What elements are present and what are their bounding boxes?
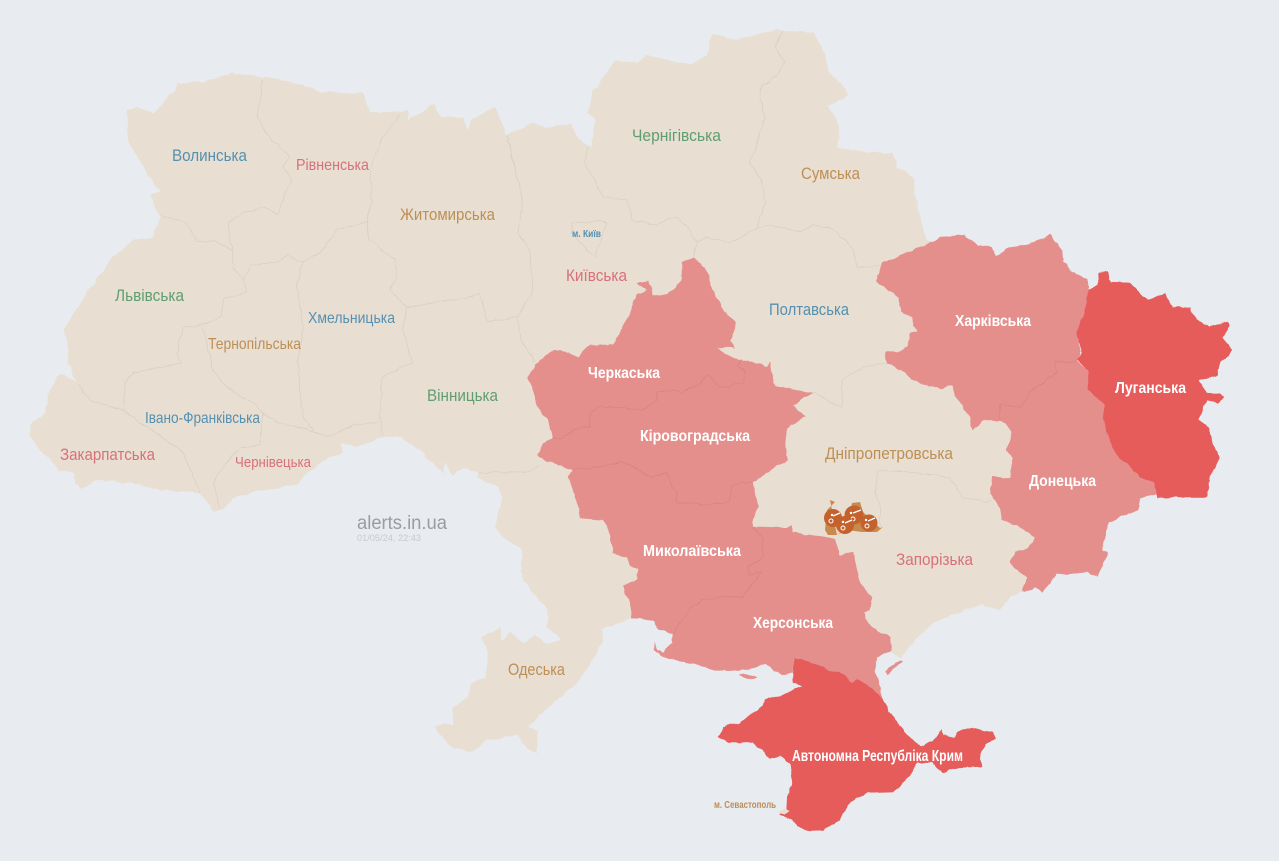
region: Luhansk oblast: [1077, 272, 1233, 498]
label: Chernihiv: Чернігівська: [632, 126, 721, 145]
label: Mykolaiv: Миколаївська: [643, 543, 741, 560]
label: Zaporizhzhia: Запорізька: [896, 550, 973, 569]
region: Cherkasy oblast: [528, 258, 745, 438]
label: Zakarpattia: Закарпатська: [60, 445, 155, 464]
icon group: artillery markers over Nikopol area: [824, 500, 883, 535]
region: Crimea: [718, 658, 995, 831]
label: Sevastopol: м. Севастополь: [714, 800, 776, 811]
label: Kharkiv: Харківська: [955, 313, 1031, 330]
label: Crimea: Автономна Республіка Крим: [792, 748, 963, 765]
icon: artillery marker 3: [836, 516, 854, 534]
label: Khmelnytskyi: Хмельницька: [308, 310, 395, 327]
label: Kirovohrad: Кіровоградська: [640, 428, 750, 445]
watermark: site name: alerts.in.ua: [357, 513, 447, 534]
label: Kyiv oblast: Київська: [566, 266, 627, 285]
oblast borders: [78, 30, 992, 527]
label: Vinnytsia: Вінницька: [427, 386, 498, 405]
region: Kherson spits: [740, 660, 903, 679]
region: Mykolaiv oblast: [568, 462, 763, 633]
label: Donetsk: Донецька: [1029, 473, 1096, 490]
label: Zhytomyr: Житомирська: [400, 205, 495, 224]
oblast labels: [60, 126, 1186, 811]
label: Luhansk: Луганська: [1115, 380, 1186, 397]
inner borders between alert oblasts: [553, 360, 1077, 633]
label: Cherkasy: Черкаська: [588, 365, 660, 382]
label: Volyn: Волинська: [172, 146, 247, 165]
label: Chernivtsi: Чернівецька: [235, 454, 312, 471]
icon: artillery marker 1: [824, 509, 842, 527]
watermark: timestamp: 01/05/24, 22:43: [357, 533, 421, 543]
icon: artillery marker 2: [844, 506, 864, 524]
label: Ivano-Frankivsk: Івано-Франківська: [145, 410, 260, 427]
landmass: oblasts without alert: [30, 30, 1060, 753]
label: Kherson: Херсонська: [753, 615, 833, 632]
label: Odesa: Одеська: [508, 660, 565, 679]
label: Kyiv city: м. Київ: [572, 229, 601, 240]
region: Sevastopol: [778, 808, 790, 815]
region: Kharkiv oblast: [877, 235, 1088, 430]
label: Rivne: Рівненська: [296, 157, 369, 174]
region: Donetsk oblast: [990, 362, 1158, 592]
icon: artillery marker 4: [860, 514, 878, 532]
marker base: district shape: [825, 500, 883, 535]
label: Dnipropetrovsk: Дніпропетровська: [825, 444, 953, 463]
region: Kirovohrad oblast: [537, 360, 812, 505]
label: Ternopil: Тернопільська: [208, 336, 301, 353]
label: Sumy: Сумська: [801, 164, 860, 183]
region: Kherson oblast: [654, 525, 892, 700]
label: Lviv: Львівська: [115, 286, 184, 305]
label: Poltava: Полтавська: [769, 300, 849, 319]
